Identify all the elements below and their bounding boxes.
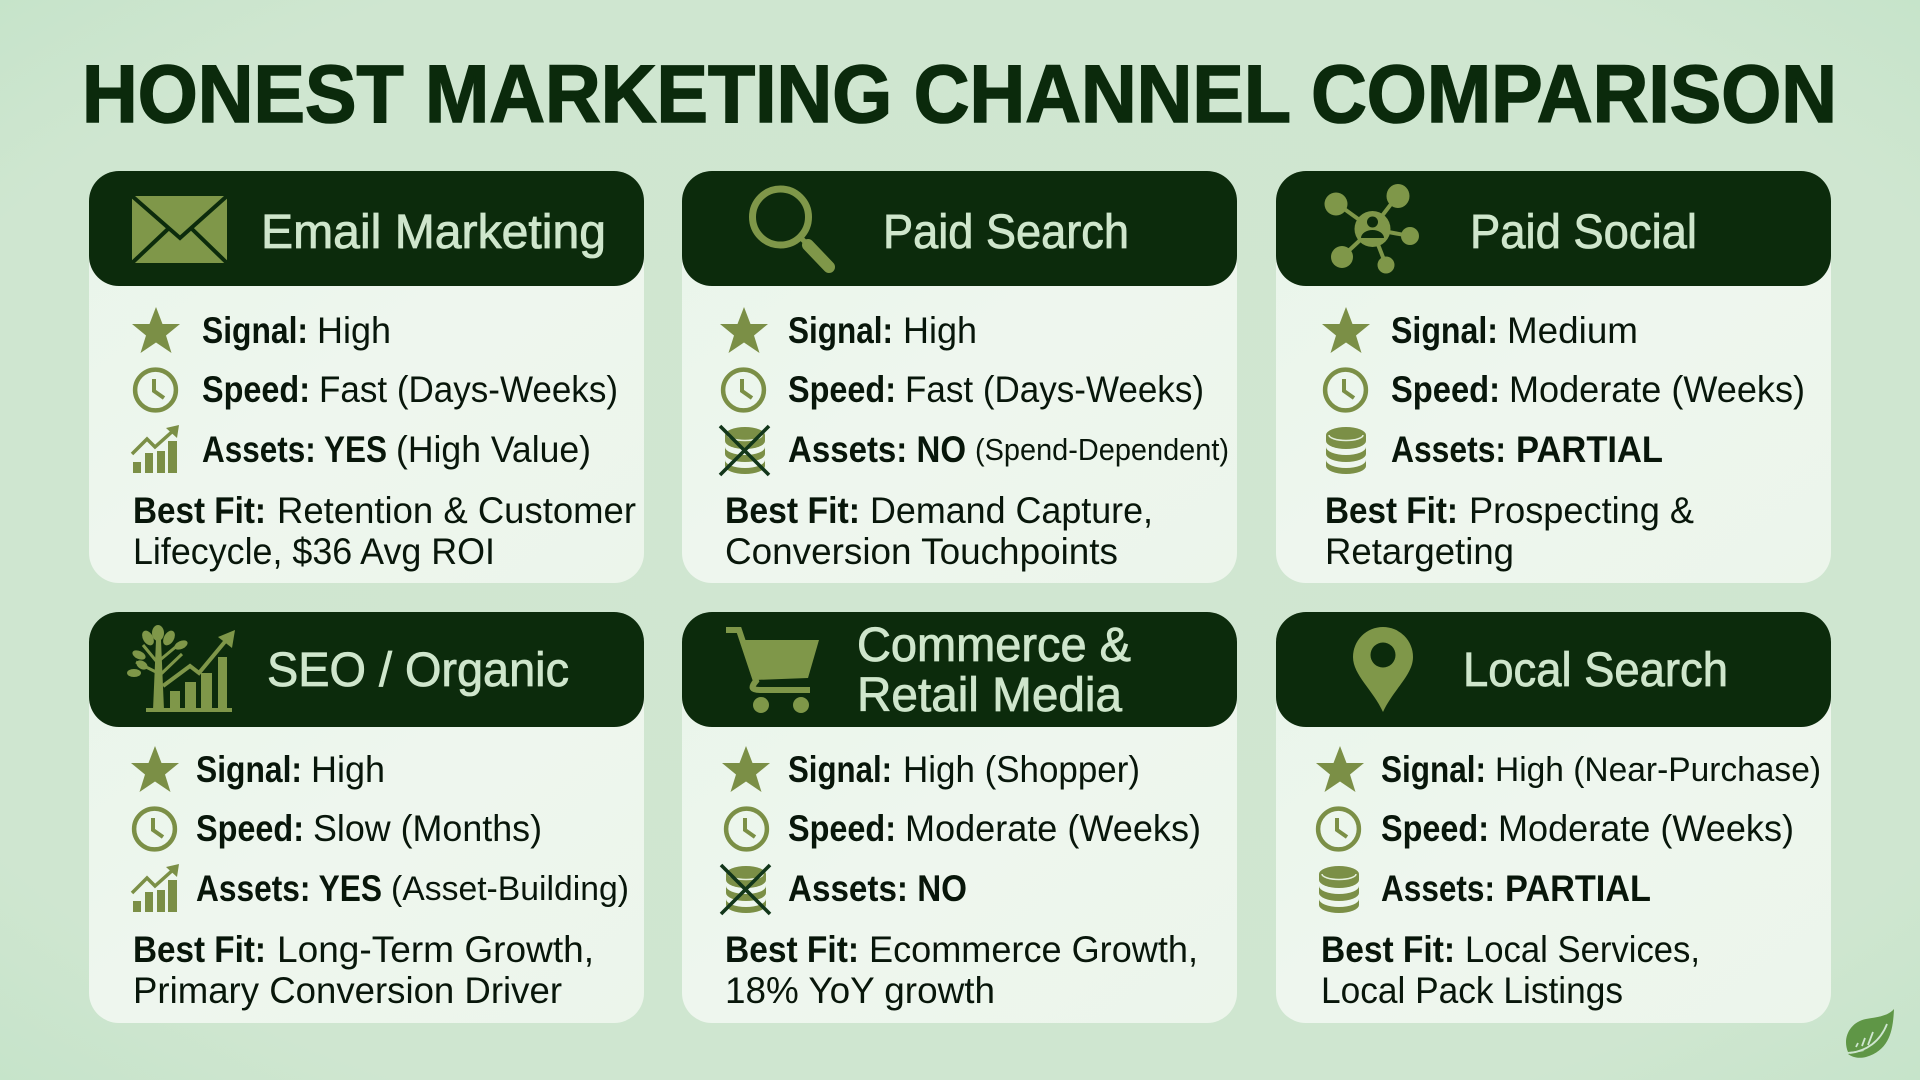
icon: database xyxy=(1319,866,1359,913)
speed row: Speed: xyxy=(202,369,310,410)
header: local search xyxy=(1276,612,1831,727)
icon: clock xyxy=(1318,809,1359,849)
icon: clock xyxy=(1325,370,1366,410)
heading: email marketing: Email Marketing xyxy=(261,206,606,259)
panel: commerce and retail media xyxy=(682,612,1237,1023)
speed row: Fast (Days-Weeks) xyxy=(319,369,618,410)
best fit: Long-Term Growth, xyxy=(277,929,594,970)
heading: paid social: Paid Social xyxy=(1470,206,1697,259)
best fit: Local Services, xyxy=(1465,929,1700,970)
best fit: Conversion Touchpoints xyxy=(725,531,1118,572)
speed row: Moderate (Weeks) xyxy=(1498,808,1794,849)
icon: star xyxy=(1322,307,1370,353)
icon: leaf logo xyxy=(1846,1009,1894,1058)
assets row xyxy=(788,429,1229,470)
assets row xyxy=(196,868,629,909)
speed row: Speed: xyxy=(196,808,304,849)
best fit: Retention & Customer xyxy=(277,490,636,531)
heading: paid search: Paid Search xyxy=(883,206,1129,259)
header: paid social xyxy=(1276,171,1831,286)
assets row xyxy=(202,429,591,470)
signal row xyxy=(1391,310,1638,351)
best fit xyxy=(725,929,1198,1011)
speed row: Moderate (Weeks) xyxy=(1509,369,1805,410)
panel: seo organic xyxy=(89,612,644,1023)
speed row: Fast (Days-Weeks) xyxy=(905,369,1204,410)
best fit: Best Fit: xyxy=(1325,490,1458,531)
assets row: Assets: YES xyxy=(196,868,382,909)
assets row: PARTIAL xyxy=(1505,868,1651,909)
icon: clock xyxy=(135,370,176,410)
signal row xyxy=(788,310,977,351)
signal row: Signal: xyxy=(1391,310,1498,351)
assets row xyxy=(1391,429,1663,470)
title: HONEST MARKETING CHANNEL COMPARISON xyxy=(82,49,1837,140)
header: email marketing xyxy=(89,171,644,286)
signal row: High xyxy=(317,310,391,351)
icon: map pin xyxy=(1353,627,1413,712)
assets row: Assets: NO xyxy=(788,868,967,909)
best fit: Best Fit: xyxy=(725,929,859,970)
panel: email marketing xyxy=(89,171,644,583)
assets row: (High Value) xyxy=(396,429,591,470)
signal row: Signal: xyxy=(202,310,308,351)
icon: social network xyxy=(1324,184,1419,274)
icon: star xyxy=(131,746,179,792)
heading: commerce and retail media xyxy=(857,619,1131,722)
best fit: Best Fit: xyxy=(725,490,860,531)
best fit xyxy=(1325,490,1694,572)
best fit: Retargeting xyxy=(1325,531,1514,572)
panel: paid search xyxy=(682,171,1237,583)
assets row: Assets: xyxy=(1381,868,1495,909)
best fit xyxy=(725,490,1153,572)
best fit: Primary Conversion Driver xyxy=(133,970,562,1011)
icon: star xyxy=(722,746,770,792)
speed row: Speed: xyxy=(1381,808,1489,849)
signal row: Signal: xyxy=(1381,749,1486,790)
best fit: 18% YoY growth xyxy=(725,970,995,1011)
signal row: High (Near-Purchase) xyxy=(1495,751,1821,789)
icon: crossed database xyxy=(720,426,769,475)
icon: magnifying glass xyxy=(752,189,829,267)
icon: crossed database xyxy=(721,865,770,914)
icon: growth chart xyxy=(132,425,179,473)
speed row xyxy=(202,369,618,410)
best fit: Best Fit: xyxy=(133,929,266,970)
header: seo organic xyxy=(89,612,644,727)
icon: clock xyxy=(134,809,175,849)
heading: local search: Local Search xyxy=(1463,644,1728,697)
speed row: Speed: xyxy=(788,369,896,410)
speed row: Moderate (Weeks) xyxy=(905,808,1201,849)
heading: commerce and retail media: Commerce & xyxy=(857,619,1131,672)
assets row: (Spend-Dependent) xyxy=(975,432,1229,467)
signal row xyxy=(196,749,385,790)
icon: growth chart xyxy=(132,864,179,912)
header: commerce and retail media xyxy=(682,612,1237,727)
panel: local search xyxy=(1276,612,1831,1023)
icon: star xyxy=(1316,746,1364,792)
signal row: Signal: xyxy=(196,749,302,790)
speed row: Speed: xyxy=(1391,369,1500,410)
icon: clock xyxy=(723,370,764,410)
assets row: Assets: NO xyxy=(788,429,966,470)
best fit: Best Fit: xyxy=(133,490,266,531)
best fit: Lifecycle, $36 Avg ROI xyxy=(133,531,495,572)
signal row: High xyxy=(903,310,977,351)
assets row: Assets: xyxy=(1391,429,1506,470)
best fit xyxy=(1321,929,1700,1011)
assets row xyxy=(1381,868,1651,909)
signal row xyxy=(1381,749,1821,790)
best fit: Prospecting & xyxy=(1469,490,1694,531)
best fit: Demand Capture, xyxy=(870,490,1153,531)
icon: star xyxy=(132,307,180,353)
signal row xyxy=(202,310,391,351)
speed row: Speed: xyxy=(788,808,896,849)
icon: tree and growth chart xyxy=(127,625,235,710)
signal row: Signal: xyxy=(788,310,893,351)
icon: shopping cart xyxy=(726,630,819,713)
signal row: Medium xyxy=(1507,310,1638,351)
speed row xyxy=(788,369,1204,410)
heading: seo organic: SEO / Organic xyxy=(267,644,569,697)
assets row: (Asset-Building) xyxy=(391,870,629,908)
heading: commerce and retail media: Retail Media xyxy=(857,669,1122,722)
panel: paid social xyxy=(1276,171,1831,583)
signal row: High (Shopper) xyxy=(903,749,1140,790)
signal row: High xyxy=(311,749,385,790)
icon: envelope xyxy=(132,196,227,263)
speed row: Slow (Months) xyxy=(313,808,542,849)
signal row: Signal: xyxy=(788,749,892,790)
speed row xyxy=(196,808,542,849)
best fit: Local Pack Listings xyxy=(1321,970,1623,1011)
assets row: Assets: YES xyxy=(202,429,387,470)
icon: star xyxy=(720,307,768,353)
best fit xyxy=(133,929,594,1011)
icon: clock xyxy=(726,809,767,849)
assets row: PARTIAL xyxy=(1516,429,1663,470)
icon: database xyxy=(1326,427,1366,474)
signal row xyxy=(788,749,1140,790)
best fit: Ecommerce Growth, xyxy=(869,929,1198,970)
best fit: Best Fit: xyxy=(1321,929,1455,970)
header: paid search xyxy=(682,171,1237,286)
best fit xyxy=(133,490,636,572)
